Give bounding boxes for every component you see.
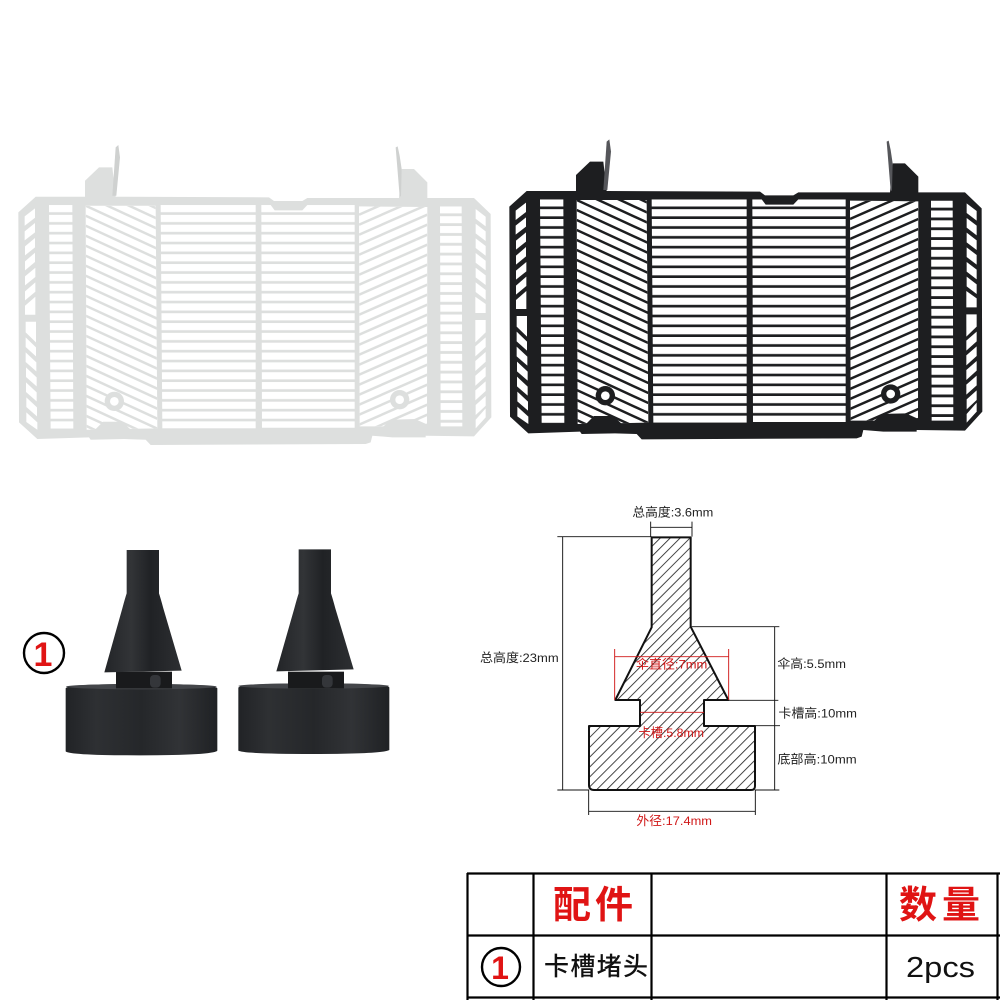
product photo: black radiator grille — [509, 139, 982, 439]
callout: part number 1: 1 — [34, 636, 52, 674]
table grid — [467, 873, 1000, 1000]
label: base height: 底部高:10mm — [777, 751, 857, 766]
table header: accessories: 配件 — [553, 874, 633, 929]
black dimension lines — [557, 522, 780, 815]
table row number: 1 — [491, 950, 509, 986]
label: groove height: 卡槽高:10mm — [778, 705, 857, 720]
table cell: quantity: 2pcs — [906, 952, 975, 984]
label: umbrella height: 伞高:5.5mm — [777, 656, 846, 671]
hatched stopper cross-section — [589, 537, 755, 790]
label: groove diameter: 卡槽:5.8mm — [638, 726, 704, 740]
product photo: silver radiator grille — [18, 145, 491, 445]
red dimension lines — [615, 649, 729, 712]
label: umbrella diameter: 伞直径:7mm — [636, 656, 707, 671]
label: total height: 总高度:23mm — [480, 650, 559, 665]
dimension diagram — [480, 505, 857, 828]
label: outer diameter: 外径:17.4mm — [636, 814, 712, 828]
product photo: rubber stopper right — [238, 549, 389, 754]
parts table — [467, 873, 1000, 1000]
label: top width: 总高度:3.6mm — [632, 505, 713, 520]
table header: quantity: 数量 — [899, 874, 980, 929]
callout: part number 1 — [24, 633, 64, 674]
table cell: part name: 卡槽堵头 — [544, 947, 648, 983]
product photo: rubber stopper left — [66, 550, 217, 755]
table row number — [482, 948, 520, 986]
